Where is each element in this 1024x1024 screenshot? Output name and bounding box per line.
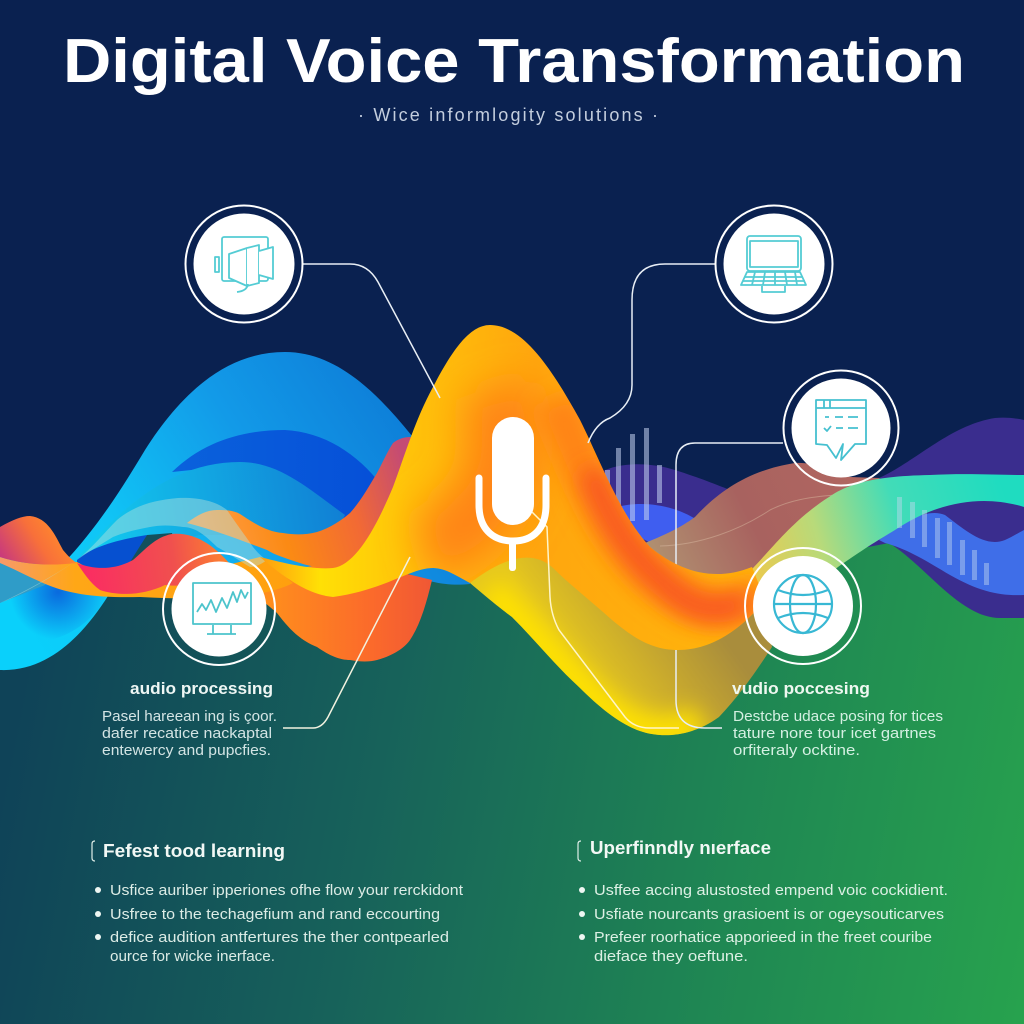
icon: microphone (479, 417, 546, 571)
connector: microphone to lower text (532, 512, 679, 728)
icon circle: checklist chat window (784, 370, 898, 486)
subtitle: · Wice informlogity solutions · (358, 105, 658, 125)
panel: Uperfinndly nerface: Usfiate nourcants grasioent is or ogeysouticarves (594, 906, 944, 923)
mauve translucent wave (640, 463, 880, 585)
teal ribbon (735, 474, 1024, 605)
label: vudio poccesing (732, 679, 943, 759)
icon circle: globe (745, 548, 861, 664)
panel: Fefest tood learning: Usfice auriber ipperiones ofhe flow your rerckidont (110, 882, 464, 899)
panel: Uperfinndly nerface: Usffee accing alustosted empend voic cockidient. (594, 882, 948, 899)
label: vudio poccesing: orfiteraly ocktine. (733, 743, 860, 759)
pink wave band (77, 534, 235, 594)
panel: Uperfinndly nerface: dieface they oeftune. (594, 948, 748, 965)
left sound bars (605, 428, 662, 521)
blue wave (0, 352, 500, 670)
title: Digital Voice Transformation (63, 27, 965, 96)
icon circle: video and audio panels (186, 206, 302, 322)
orange wave left tip (0, 516, 77, 565)
connector: top left icon to wave (303, 264, 440, 398)
panel: Uperfinndly nerface: Uperfinndly nıerface (590, 837, 771, 858)
connector: audio processing text to wave (283, 557, 410, 728)
panel: Fefest tood learning: ource for wicke inerface. (110, 948, 275, 965)
connector: laptop icon to wave (588, 264, 715, 443)
label: audio processing: Pasel hareean ing is çoor. (102, 709, 277, 725)
green lower background (0, 540, 1024, 1024)
upper orange band (187, 437, 425, 568)
label: vudio poccesing: Destcbe udace posing for tices (733, 709, 943, 725)
left translucent ribbon (0, 498, 267, 603)
icon circle: laptop (716, 206, 832, 322)
panel: Fefest tood learning (92, 840, 464, 965)
label: audio processing: dafer recatice nackaptal (102, 726, 272, 742)
main central peak (260, 325, 758, 650)
icon circle: monitor with waveform (163, 553, 275, 665)
connector: checklist icon to text (676, 443, 783, 728)
panel: Fefest tood learning: Usfree to the techagefium and rand eccourting (110, 906, 440, 923)
lower red orange lobe (225, 560, 432, 662)
label: audio processing: audio processing (130, 679, 273, 698)
label: vudio poccesing: vudio poccesing (732, 679, 870, 698)
label: audio processing: entewercy and pupcfies. (102, 743, 271, 759)
panel: Fefest tood learning: Fefest tood learning (103, 840, 285, 861)
panel: Uperfinndly nerface: Prefeer roorhatice apporieed in the freet couribe (594, 929, 932, 946)
right purple wave (601, 418, 1024, 618)
right sound bars (897, 497, 989, 585)
label: vudio poccesing: tature nore tour icet gartnes (733, 726, 936, 742)
label: audio processing (102, 679, 277, 759)
yellow lower wave (470, 558, 772, 736)
panel: Fefest tood learning: defice audition antfertures the ther contpearled (110, 929, 449, 946)
panel: Uperfinndly nerface (578, 837, 948, 965)
orange flowing band (0, 557, 293, 599)
